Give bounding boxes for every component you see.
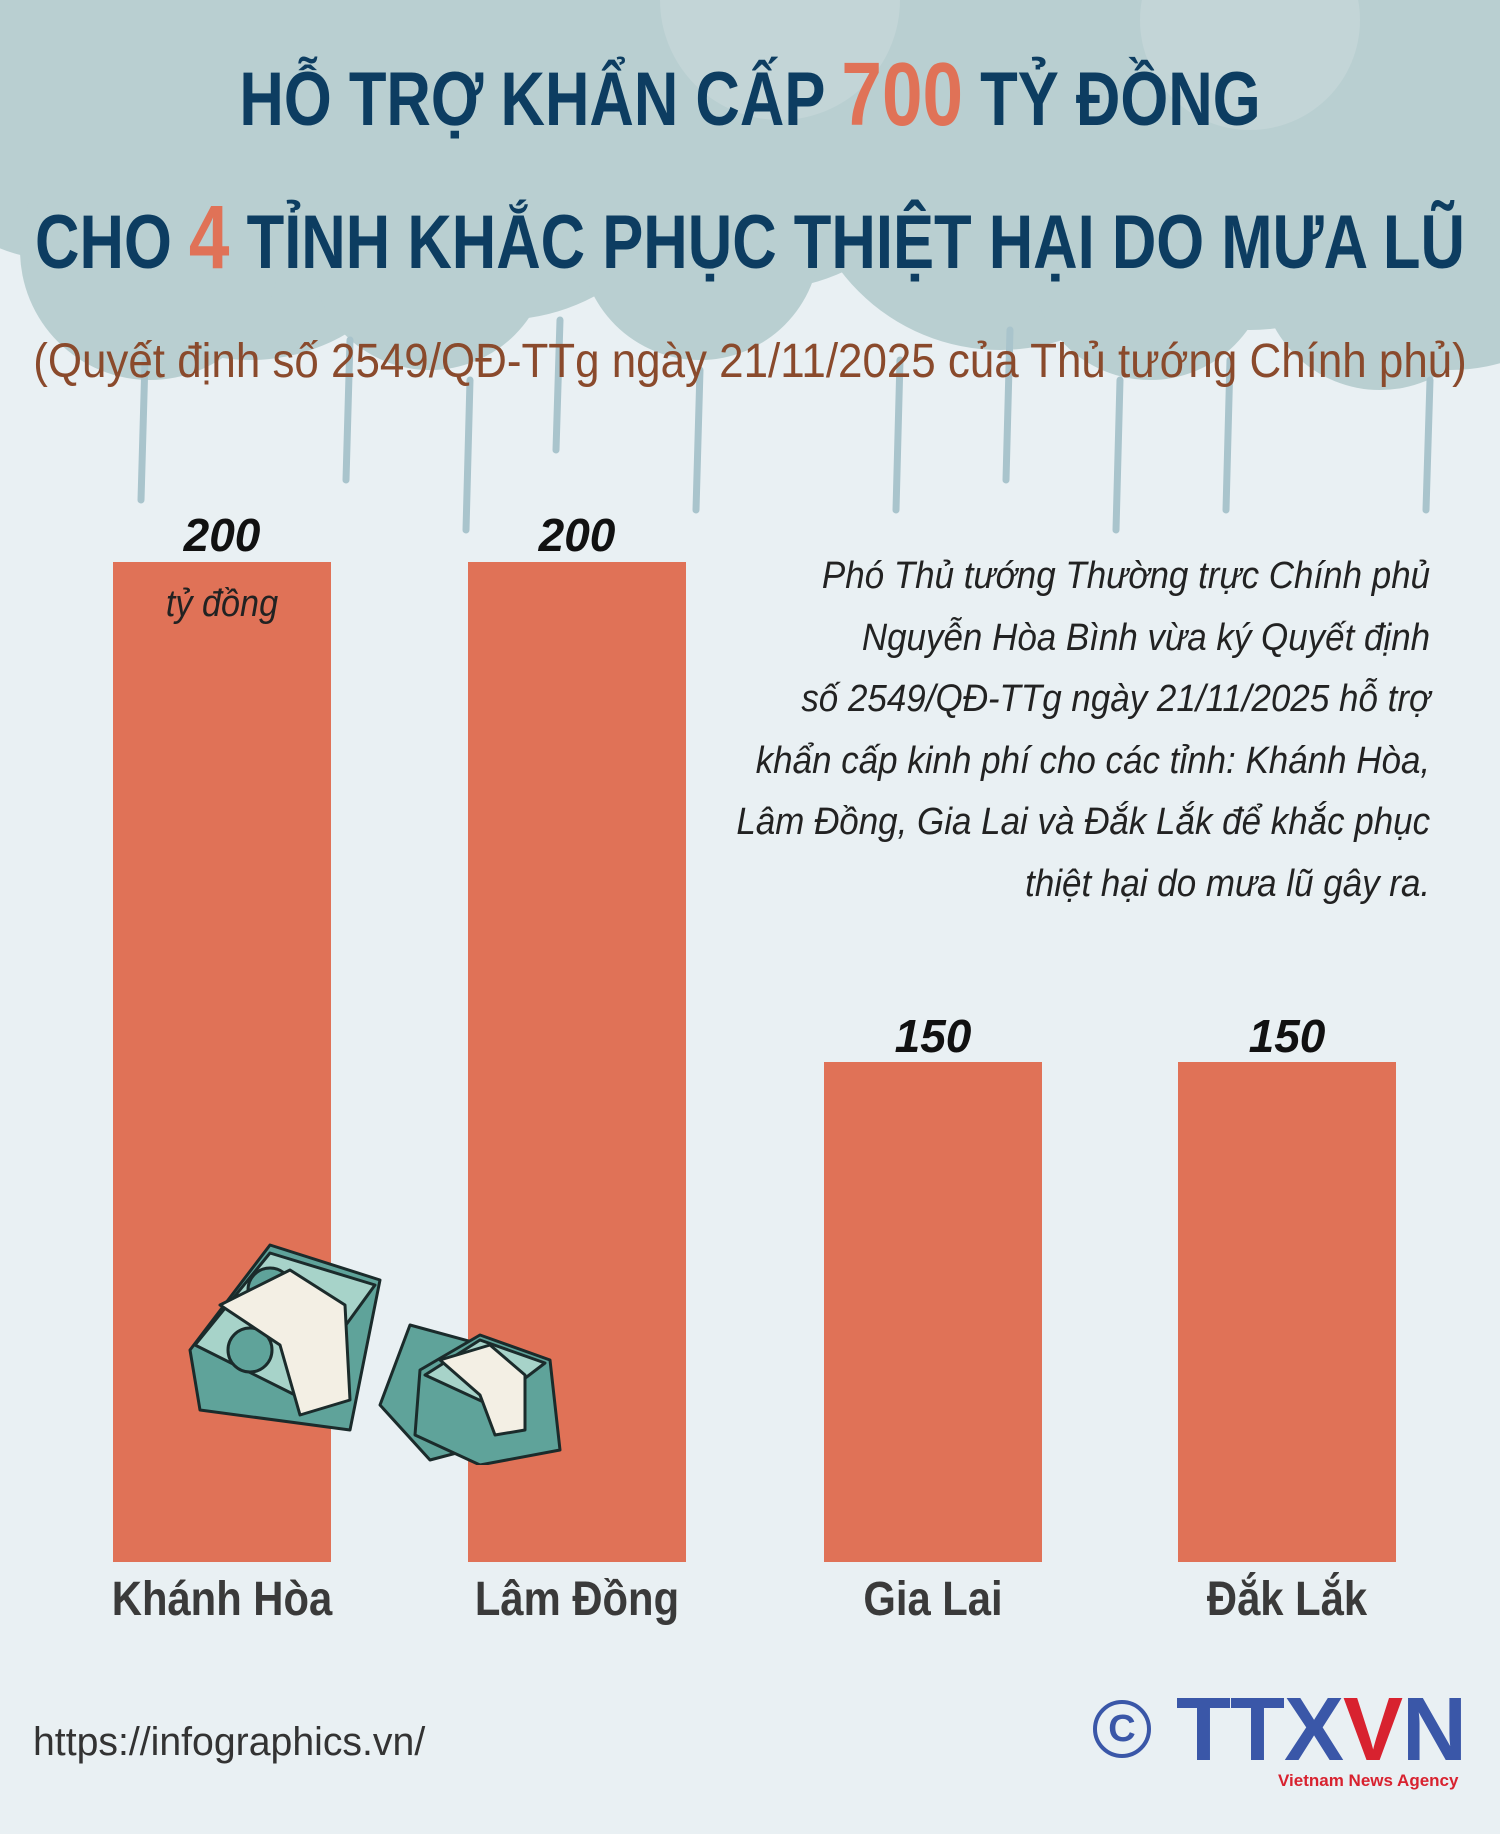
unit: tỷ đồng: [166, 583, 278, 625]
description text: khẩn cấp kinh phí cho các tỉnh: Khánh Hòa,: [756, 740, 1430, 782]
tagline: Vietnam News Agency: [1278, 1771, 1458, 1790]
title line 1: HỖ TRỢ KHẨN CẤP 700 TỶ ĐỒNG: [239, 45, 1261, 145]
description text: Phó Thủ tướng Thường trực Chính phủ: [822, 555, 1430, 597]
label Đắk Lắk: Đắk Lắk: [1207, 1573, 1367, 1626]
label Gia Lai: Gia Lai: [863, 1573, 1003, 1626]
icon: copyright: C: [1108, 1708, 1136, 1750]
description text: số 2549/QĐ-TTg ngày 21/11/2025 hỗ trợ: [801, 678, 1430, 720]
logo text: TTXVN: [1176, 1680, 1466, 1780]
logo TTXVN: [1093, 1680, 1466, 1790]
description text: thiệt hại do mưa lũ gây ra.: [1025, 862, 1430, 904]
description text: [736, 555, 1432, 904]
icon: copyright: [1093, 1700, 1151, 1758]
subtitle: (Quyết định số 2549/QĐ-TTg ngày 21/11/2025 của Thủ tướng Chính phủ): [33, 335, 1467, 388]
bar: Lâm Đồng: [468, 562, 686, 1562]
value Gia Lai: 150: [895, 1010, 971, 1062]
value Khánh Hòa: 200: [184, 509, 260, 561]
bar: Khánh Hòa: [113, 562, 331, 1562]
background clouds and rain: [0, 0, 1500, 534]
description text: Nguyễn Hòa Bình vừa ký Quyết định: [862, 616, 1430, 658]
value Lâm Đồng: 200: [539, 509, 615, 561]
label Khánh Hòa: Khánh Hòa: [112, 1573, 332, 1626]
title line 2: CHO 4 TỈNH KHẮC PHỤC THIỆT HẠI DO MƯA LŨ: [35, 188, 1465, 288]
label Lâm Đồng: Lâm Đồng: [475, 1573, 679, 1626]
description text: Lâm Đồng, Gia Lai và Đắk Lắk để khắc phục: [736, 801, 1430, 843]
bar: Đắk Lắk: [1178, 1062, 1396, 1562]
icon: money stacks: [188, 1244, 562, 1465]
bar: Gia Lai: [824, 1062, 1042, 1562]
url: https://infographics.vn/: [33, 1720, 425, 1764]
value Đắk Lắk: 150: [1249, 1010, 1325, 1062]
